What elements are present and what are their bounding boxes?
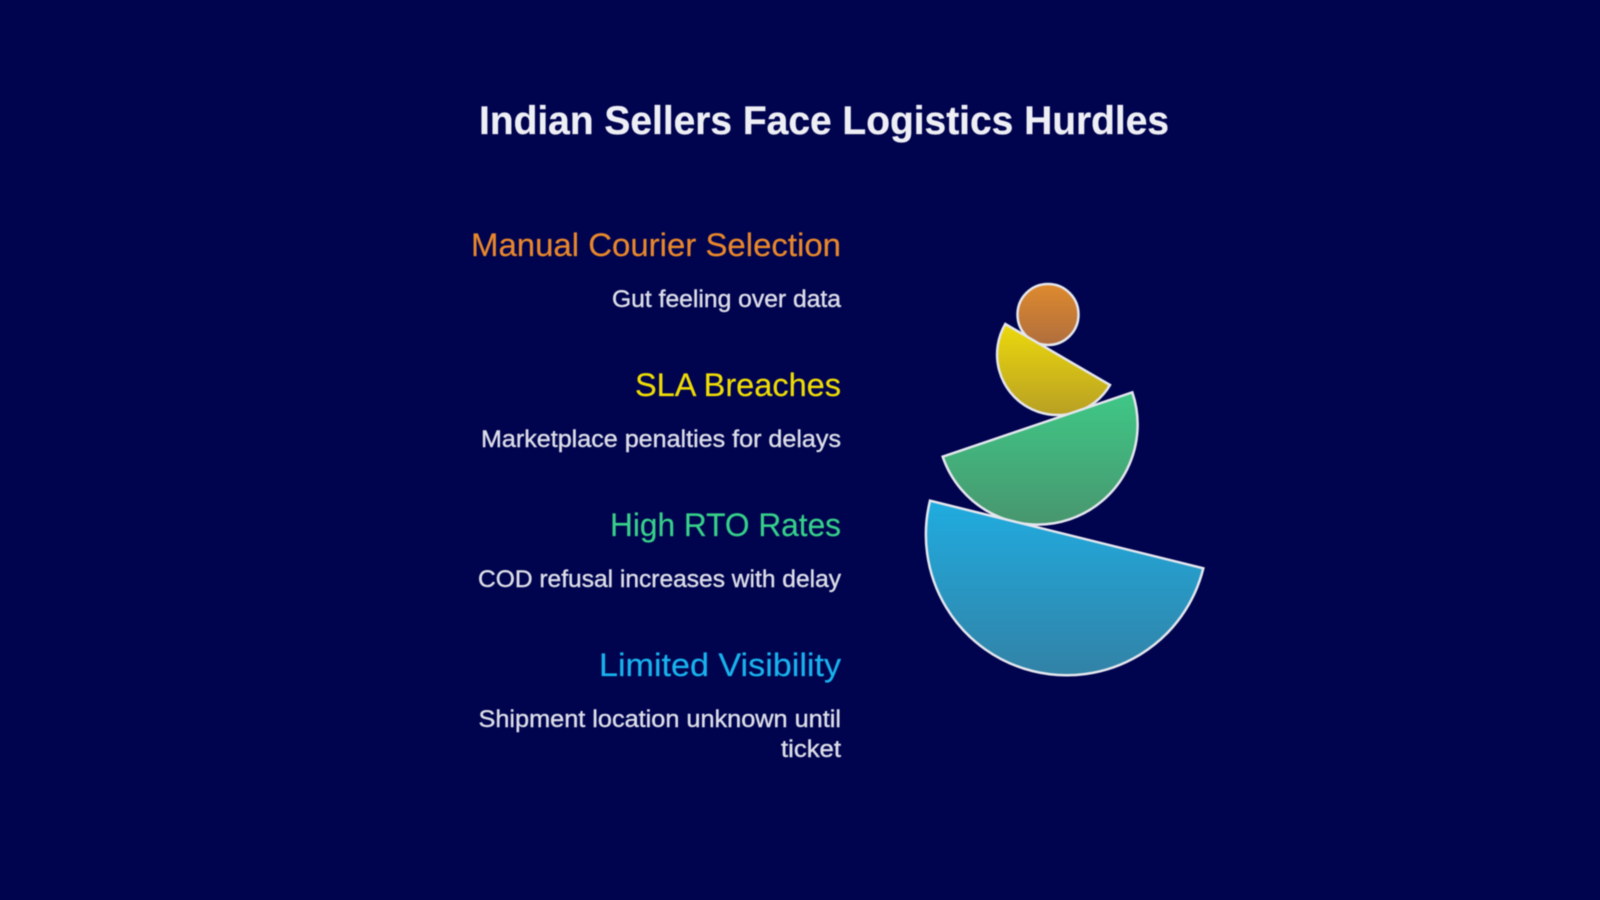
item: Manual Courier Selection xyxy=(471,227,842,313)
item: SLA Breaches xyxy=(481,367,841,453)
description: Shipment location unknown until ticket: Shipment location unknown until xyxy=(478,706,841,733)
description: COD refusal increases with delay: COD refusal increases with delay xyxy=(478,566,841,593)
heading: Limited Visibility: Limited Visibility xyxy=(599,647,841,683)
shape: green half circle xyxy=(943,392,1138,525)
item: Limited Visibility xyxy=(478,647,841,763)
item: High RTO Rates xyxy=(478,507,841,593)
description: Shipment location unknown until ticket xyxy=(478,706,841,763)
balanced stack of shapes xyxy=(926,284,1203,675)
heading: Manual Courier Selection: Manual Courier Selection xyxy=(471,227,841,263)
description: Shipment location unknown until ticket: ticket xyxy=(781,736,841,763)
shape: yellow half circle xyxy=(997,324,1110,415)
description: Marketplace penalties for delays: Marketplace penalties for delays xyxy=(481,426,841,453)
shape: blue half circle xyxy=(926,501,1203,675)
description: Gut feeling over data: Gut feeling over data xyxy=(612,286,842,313)
title: Indian Sellers Face Logistics Hurdles xyxy=(479,99,1169,143)
shape: orange circle xyxy=(1018,284,1078,345)
heading: SLA Breaches: SLA Breaches xyxy=(635,367,841,403)
heading: High RTO Rates: High RTO Rates xyxy=(610,507,841,543)
